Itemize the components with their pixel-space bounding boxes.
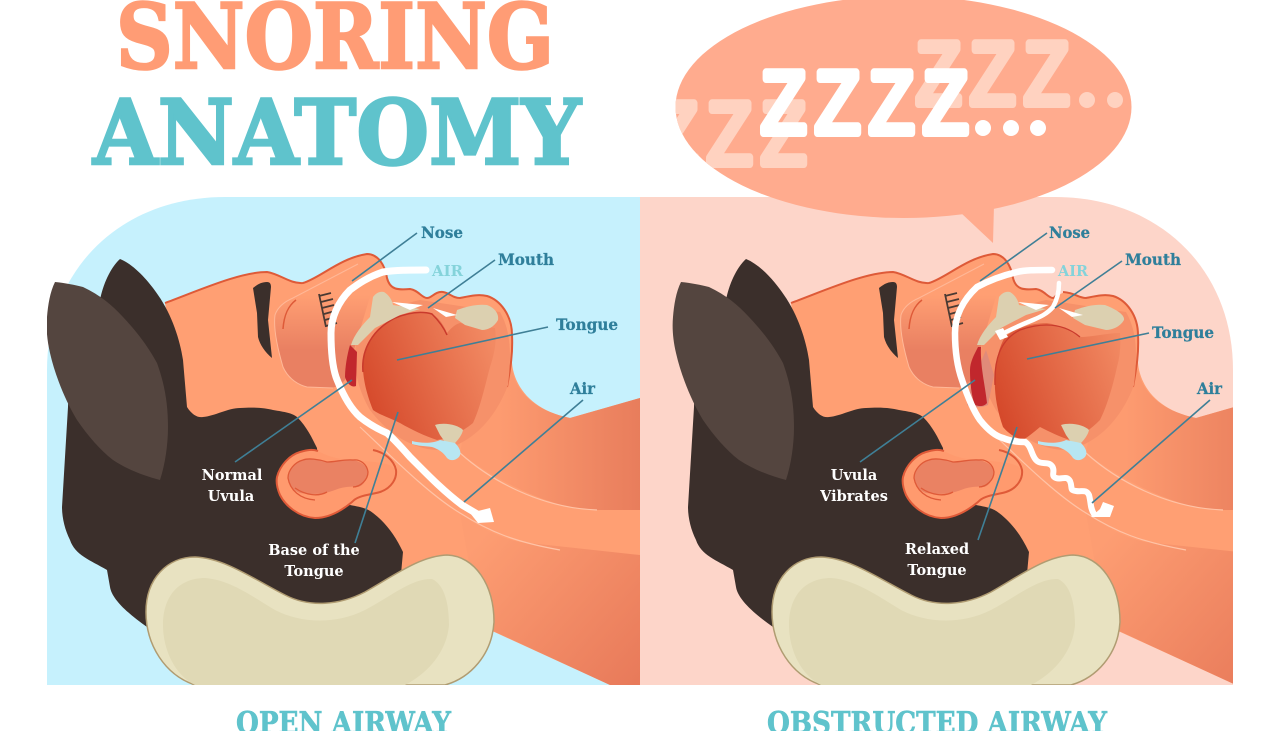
jaw: [355, 300, 510, 450]
nasal cheek: [275, 310, 366, 388]
epiglottis: [435, 424, 463, 443]
illustration: open airway head: [47, 254, 640, 685]
branch arrow head: [995, 328, 1008, 340]
illustration: obstructed airway head: [673, 254, 1266, 685]
pillow: [146, 555, 494, 685]
jaw: [981, 300, 1136, 450]
labels: open airway: AIR: [431, 262, 464, 280]
air path: [955, 270, 1052, 442]
pillow inner: [163, 578, 449, 685]
labels: obstructed airway: Relaxed: [905, 541, 969, 558]
neck shading lower: [489, 544, 640, 685]
leader lines: obstructed airway: [860, 233, 1210, 540]
air path: [331, 270, 484, 518]
skin: face and neck: [165, 254, 640, 685]
eyebrow: [253, 282, 272, 358]
nose highlight and cheek edge: [901, 264, 984, 388]
title: ANATOMY: ANATOMY: [92, 80, 583, 186]
inner ear lines: [914, 459, 994, 500]
uvula shadow: [967, 350, 994, 407]
inner ear lines: [288, 459, 368, 500]
esophagus: [412, 440, 460, 460]
arrow head: [470, 508, 494, 523]
esophagus: [1038, 440, 1086, 460]
tongue outline: [995, 325, 1080, 385]
skin: face and neck: [791, 254, 1266, 685]
labels: open airway: Air: [569, 379, 596, 398]
labels: obstructed airway: Air: [1196, 379, 1223, 398]
labels: open airway: Normal: [202, 467, 263, 484]
labels: obstructed airway: Vibrates: [819, 488, 888, 505]
faint zzz left: ZZZ: [653, 85, 806, 183]
main dots: [975, 120, 1046, 136]
labels: obstructed airway: [819, 223, 1223, 579]
pillow: [772, 555, 1120, 685]
nasal cheek: [901, 310, 992, 388]
ear outline: [903, 450, 1022, 518]
palate bone: [351, 292, 420, 345]
soft palate: [455, 305, 498, 330]
bubble tail: [960, 205, 994, 243]
throat lines: [360, 427, 597, 550]
ear: [903, 450, 1021, 518]
nostril detail: [909, 300, 922, 329]
eyelashes: [319, 293, 337, 327]
labels: open airway: Tongue: [284, 563, 344, 580]
uvula: [345, 345, 357, 387]
epiglottis: [1061, 424, 1089, 443]
labels: obstructed airway: Tongue: [1152, 323, 1214, 342]
faint dots right: [1079, 92, 1123, 108]
ear: [278, 450, 346, 517]
soft palate: [1073, 305, 1124, 330]
faint zzz right: ZZZ: [916, 25, 1069, 123]
palate bone: [977, 292, 1046, 345]
inner ear: [288, 459, 368, 494]
profile outline: [165, 254, 512, 387]
hair highlight: [673, 282, 794, 480]
labels: open airway: Nose: [421, 223, 463, 242]
neck shading upper: [1145, 389, 1233, 510]
tongue outline: [363, 312, 447, 372]
air branch into mouth: [1006, 283, 1059, 332]
teeth: [1018, 302, 1083, 317]
labels: open airway: Tongue: [556, 315, 618, 334]
labels: open airway: Mouth: [498, 250, 554, 269]
labels: open airway: [202, 223, 618, 580]
speech bubble: [653, 0, 1132, 243]
labels: obstructed airway: Mouth: [1125, 250, 1181, 269]
squiggle arrow head: [1091, 502, 1114, 517]
eyelashes: [945, 293, 963, 327]
panel: open airway background: [47, 197, 640, 685]
throat lines: [999, 440, 1223, 551]
nose highlight and cheek edge: [275, 264, 358, 388]
hair: [62, 259, 403, 627]
profile outline: [791, 254, 1138, 387]
tongue: [363, 313, 496, 440]
neck shading upper: [519, 390, 640, 510]
vibrating uvula: [970, 347, 987, 406]
labels: obstructed airway: AIR: [1057, 262, 1089, 280]
labels: obstructed airway: Uvula: [831, 467, 878, 484]
labels: obstructed airway: Tongue: [907, 562, 967, 579]
labels: open airway: Uvula: [208, 488, 255, 505]
neck shading lower: [1115, 544, 1233, 684]
main zzzz text: ZZZZ: [761, 54, 968, 152]
panel: obstructed airway background: [640, 197, 1233, 685]
labels: obstructed airway: Nose: [1049, 223, 1090, 242]
leader lines: open airway: [235, 233, 583, 543]
inner ear: [914, 459, 994, 494]
pillow inner: [789, 578, 1075, 685]
ear outline: [277, 450, 396, 518]
teeth: [392, 302, 457, 317]
hair: [688, 259, 1029, 627]
vibrating air squiggle: [1025, 442, 1094, 514]
relaxed tongue: [995, 323, 1120, 440]
eyebrow: [879, 282, 898, 358]
hair highlight: [47, 282, 168, 480]
nostril detail: [283, 300, 296, 329]
labels: open airway: Base of the: [268, 542, 360, 559]
